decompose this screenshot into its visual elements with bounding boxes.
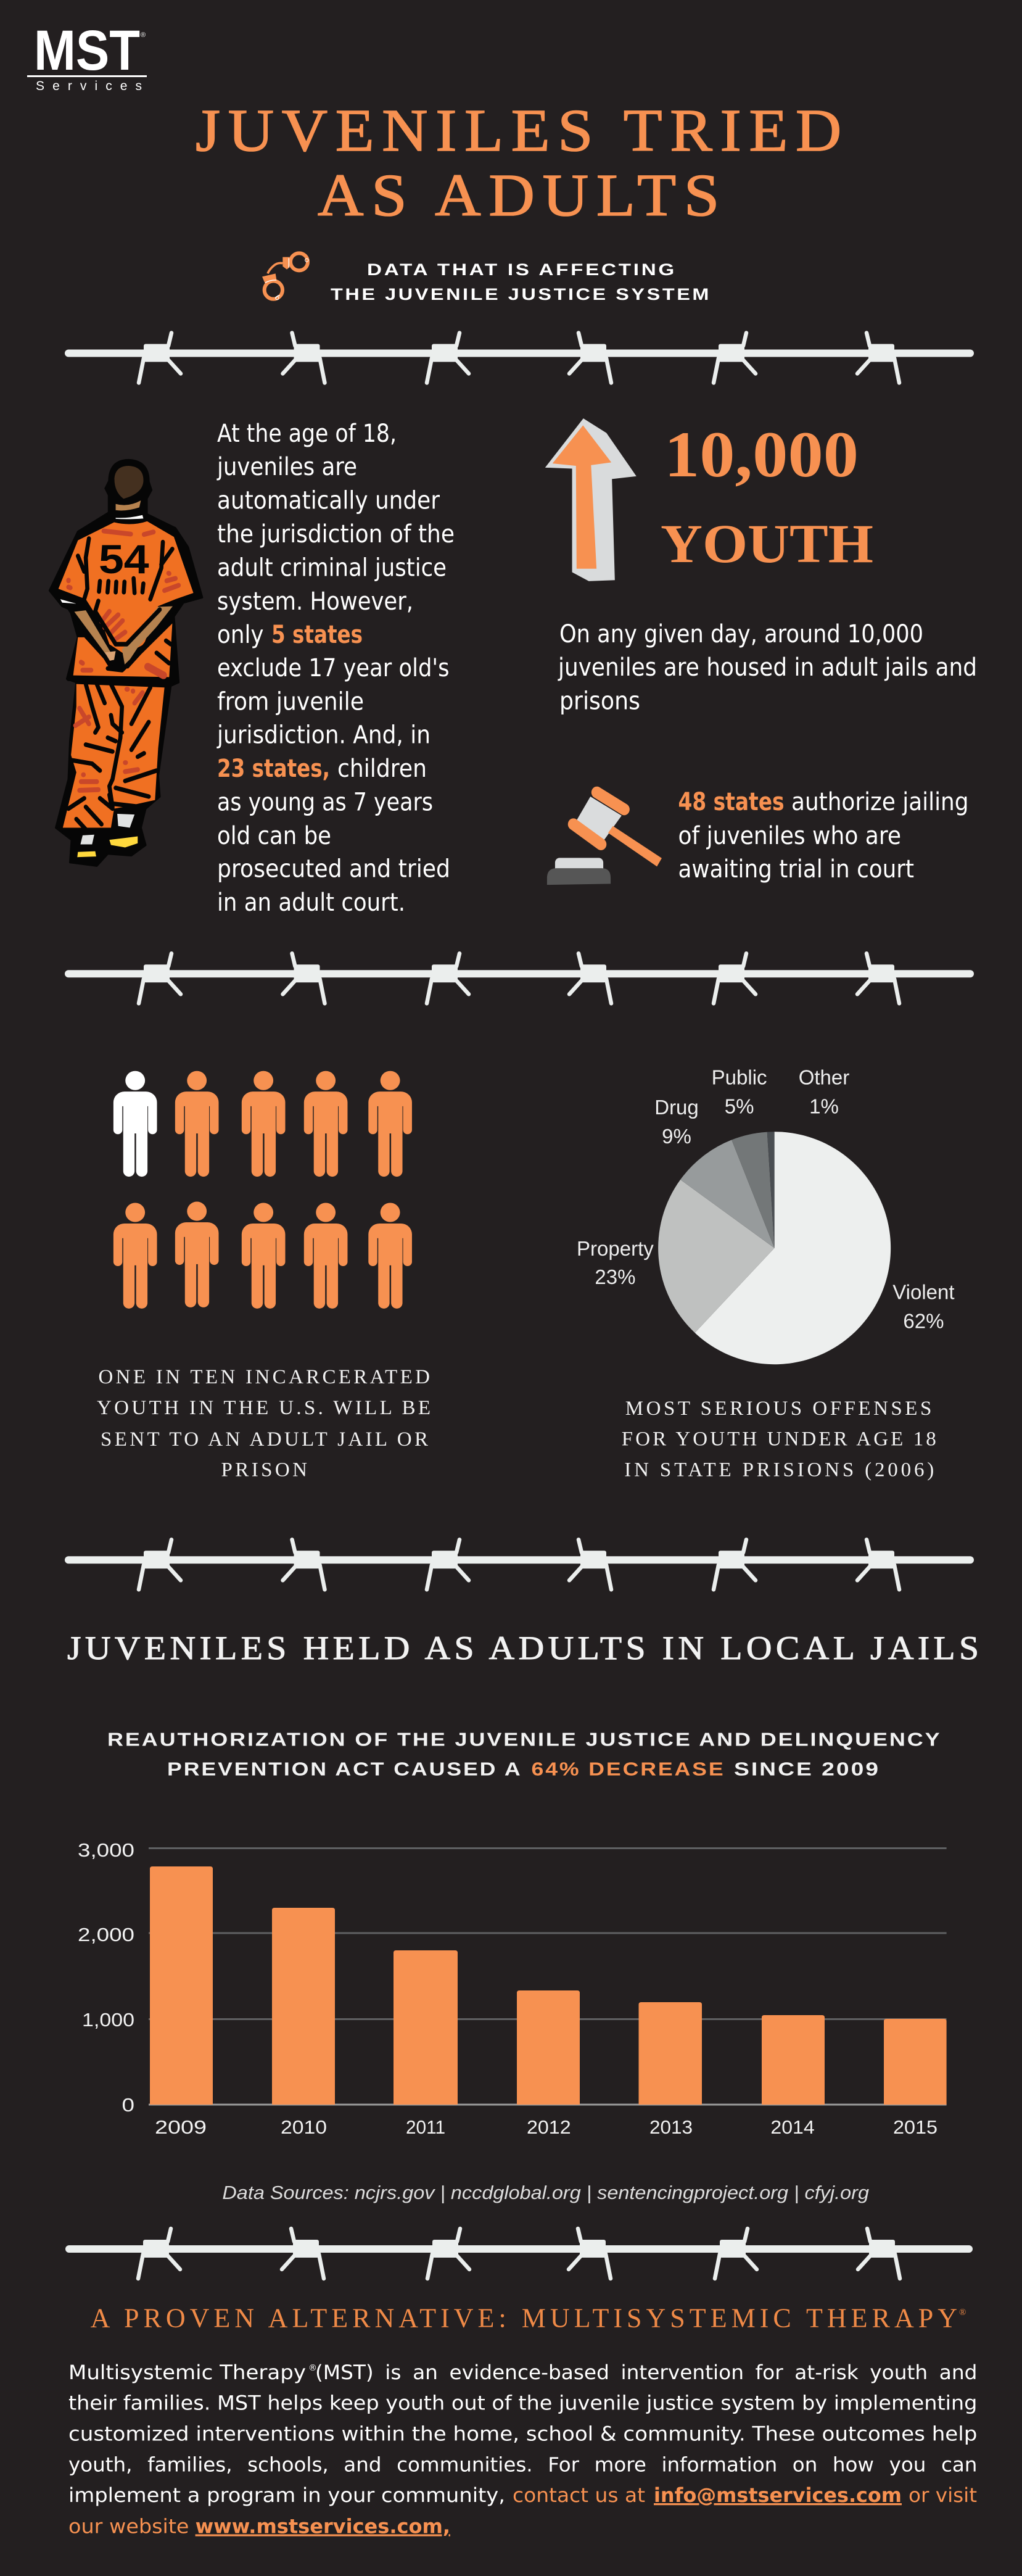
icon: handcuffs (262, 253, 308, 300)
bar chart: juveniles in local jails: 2,000 (78, 1924, 134, 1945)
text block: 48 states: 48 states (678, 788, 785, 816)
illustration: prisoner seen from behind (49, 459, 202, 866)
pie chart: most serious offenses: 5% (725, 1095, 754, 1118)
text block: age of jurisdiction: the jurisdiction of the (217, 520, 455, 549)
text block: about multisystemic therapy (68, 2361, 977, 2538)
caption: one in ten: YOUTH IN THE U.S. WILL BE (97, 1397, 431, 1419)
bar chart: juveniles in local jails: 1,000 (82, 2009, 134, 2031)
caption: one in ten: SENT TO AN ADULT JAIL OR (101, 1428, 428, 1451)
logo: MST Services: Services (36, 79, 142, 93)
logo: MST Services: ® (141, 31, 146, 39)
subheading: reauthorization: 64% DECREASE (532, 1758, 725, 1780)
data sources: Data Sources: ncjrs.gov | nccdglobal.org | sentencingproject.org | cfyj.org (222, 2182, 869, 2203)
text block: age of jurisdiction: 23 states, (217, 755, 330, 783)
text block: age of jurisdiction: from juvenile (217, 688, 364, 716)
pie chart: most serious offenses: Violent (892, 1281, 955, 1304)
text block: about multisystemic therapy: www.mstservices.com, (196, 2514, 450, 2538)
text block: about multisystemic therapy: contact us at (513, 2483, 645, 2507)
stat: 10,000 youth: 10,000 (664, 418, 859, 491)
pie chart: most serious offenses: 23% (595, 1265, 635, 1288)
icon: gavel (547, 792, 662, 885)
text block: housed in adult jails: juveniles are housed in adult jails and (558, 653, 977, 682)
text block: 48 states: authorize jailing (791, 788, 968, 816)
text block: age of jurisdiction: old can be (217, 822, 331, 850)
pie chart: most serious offenses: Property (577, 1237, 654, 1260)
text block: about multisystemic therapy: their families. MST helps keep youth out of the juvenile justice system by implementing (68, 2392, 977, 2415)
divider: barbed wire 2 (65, 953, 974, 1003)
text block: age of jurisdiction: jurisdiction. And, in (216, 721, 431, 749)
text block: about multisystemic therapy: Multisystemic Therapy (68, 2361, 306, 2384)
caption: most serious offenses: FOR YOUTH UNDER AGE 18 (622, 1428, 936, 1451)
bar chart: juveniles in local jails: 3,000 (78, 1839, 134, 1861)
pie chart: most serious offenses: Public (712, 1066, 767, 1089)
pie chart: most serious offenses: Drug (654, 1096, 699, 1119)
caption: one in ten (97, 1366, 431, 1481)
bar chart: juveniles in local jails: 0 (122, 2094, 134, 2116)
icon: up arrow (545, 418, 637, 581)
illustration: prisoner seen from behind: 54 (99, 537, 149, 582)
subheading: reauthorization: REAUTHORIZATION OF THE JUVENILE JUSTICE AND DELINQUENCY (107, 1729, 941, 1750)
heading: a proven alternative: A PROVEN ALTERNATIVE: MULTISYSTEMIC THERAPY (91, 2303, 957, 2334)
subheading: reauthorization: PREVENTION ACT CAUSED A (167, 1758, 522, 1780)
text block: age of jurisdiction: system. However, (217, 587, 413, 616)
heading: held in local jails: JUVENILES HELD AS ADULTS IN LOCAL JAILS (67, 1630, 983, 1667)
subtitle: DATA THAT IS AFFECTING (367, 260, 677, 279)
text block: about multisystemic therapy: customized interventions within the home, school & community. These outcomes help (68, 2422, 977, 2446)
caption: most serious offenses: MOST SERIOUS OFFENSES (625, 1398, 931, 1420)
text block: about multisystemic therapy: info@mstservices.com (654, 2483, 902, 2507)
pie chart: most serious offenses: 1% (809, 1095, 839, 1118)
caption: one in ten: ONE IN TEN INCARCERATED (99, 1366, 430, 1388)
bar chart: juveniles in local jails: 2012 (527, 2116, 571, 2138)
text block: age of jurisdiction: 5 states (271, 621, 363, 649)
text block: housed in adult jails: On any given day, around 10,000 (559, 620, 923, 648)
text block: age of jurisdiction: exclude 17 year old's (217, 654, 449, 682)
caption: one in ten: PRISON (221, 1459, 307, 1481)
text block: age of jurisdiction (216, 420, 455, 917)
divider: barbed wire 4 (65, 2229, 973, 2279)
bar chart: juveniles in local jails: 2009 (155, 2116, 207, 2138)
caption: most serious offenses (622, 1398, 936, 1481)
text block: housed in adult jails (558, 620, 977, 716)
text block: age of jurisdiction: At the age of 18, (217, 420, 397, 448)
title (196, 97, 849, 228)
text block: 48 states (678, 788, 968, 884)
text block: age of jurisdiction: adult criminal justice (217, 554, 447, 582)
pie chart: most serious offenses: Other (799, 1066, 849, 1089)
bar chart: juveniles in local jails (78, 1839, 947, 2138)
text block: about multisystemic therapy: ® (308, 2363, 317, 2373)
text block: housed in adult jails: prisons (559, 687, 640, 716)
text block: about multisystemic therapy: (MST) is an evidence-based intervention for at-risk youth and (315, 2361, 977, 2384)
pie chart: most serious offenses (577, 1066, 955, 1364)
pie chart: most serious offenses: 9% (662, 1125, 691, 1148)
text block: age of jurisdiction: only (217, 621, 264, 649)
bar chart: juveniles in local jails: 2014 (770, 2116, 815, 2138)
text block: 48 states: awaiting trial in court (678, 855, 914, 884)
divider: barbed wire 3 (65, 1539, 974, 1589)
title: JUVENILES TRIED (196, 97, 849, 164)
logo: MST Services: MST (34, 19, 140, 82)
text block: about multisystemic therapy: or visit (909, 2483, 977, 2507)
bar chart: juveniles in local jails: 2011 (406, 2116, 445, 2138)
text block: age of jurisdiction: automatically under (217, 487, 440, 515)
text block: about multisystemic therapy: our website (68, 2514, 189, 2538)
subtitle (331, 260, 711, 304)
text block: age of jurisdiction: children (337, 755, 427, 783)
text block: age of jurisdiction: prosecuted and tried (217, 855, 450, 884)
bar chart: juveniles in local jails: 2015 (893, 2116, 938, 2138)
caption: most serious offenses: IN STATE PRISIONS (2006) (624, 1459, 934, 1481)
subheading: reauthorization (107, 1729, 941, 1780)
divider: barbed wire 1 (65, 333, 974, 383)
subheading: reauthorization: SINCE 2009 (734, 1758, 880, 1780)
heading: a proven alternative: ® (959, 2308, 966, 2317)
bar chart: juveniles in local jails: 2013 (649, 2116, 693, 2138)
title: AS ADULTS (318, 162, 727, 228)
bar chart: juveniles in local jails: 2010 (281, 2116, 327, 2138)
pie chart: most serious offenses: 62% (903, 1310, 944, 1333)
text block: 48 states: of juveniles who are (678, 822, 901, 850)
subtitle: THE JUVENILE JUSTICE SYSTEM (331, 285, 711, 304)
text block: age of jurisdiction: as young as 7 years (217, 788, 433, 816)
stat: 10,000 youth: YOUTH (661, 514, 873, 574)
text block: age of jurisdiction: juveniles are (216, 453, 357, 481)
stat: 10,000 youth (661, 418, 873, 574)
text block: about multisystemic therapy: youth, families, schools, and communities. For more information on how you can (68, 2453, 977, 2477)
pictogram: one in ten youth (113, 1071, 412, 1309)
text block: about multisystemic therapy: implement a program in your community, (68, 2483, 505, 2507)
text block: age of jurisdiction: in an adult court. (217, 888, 405, 917)
